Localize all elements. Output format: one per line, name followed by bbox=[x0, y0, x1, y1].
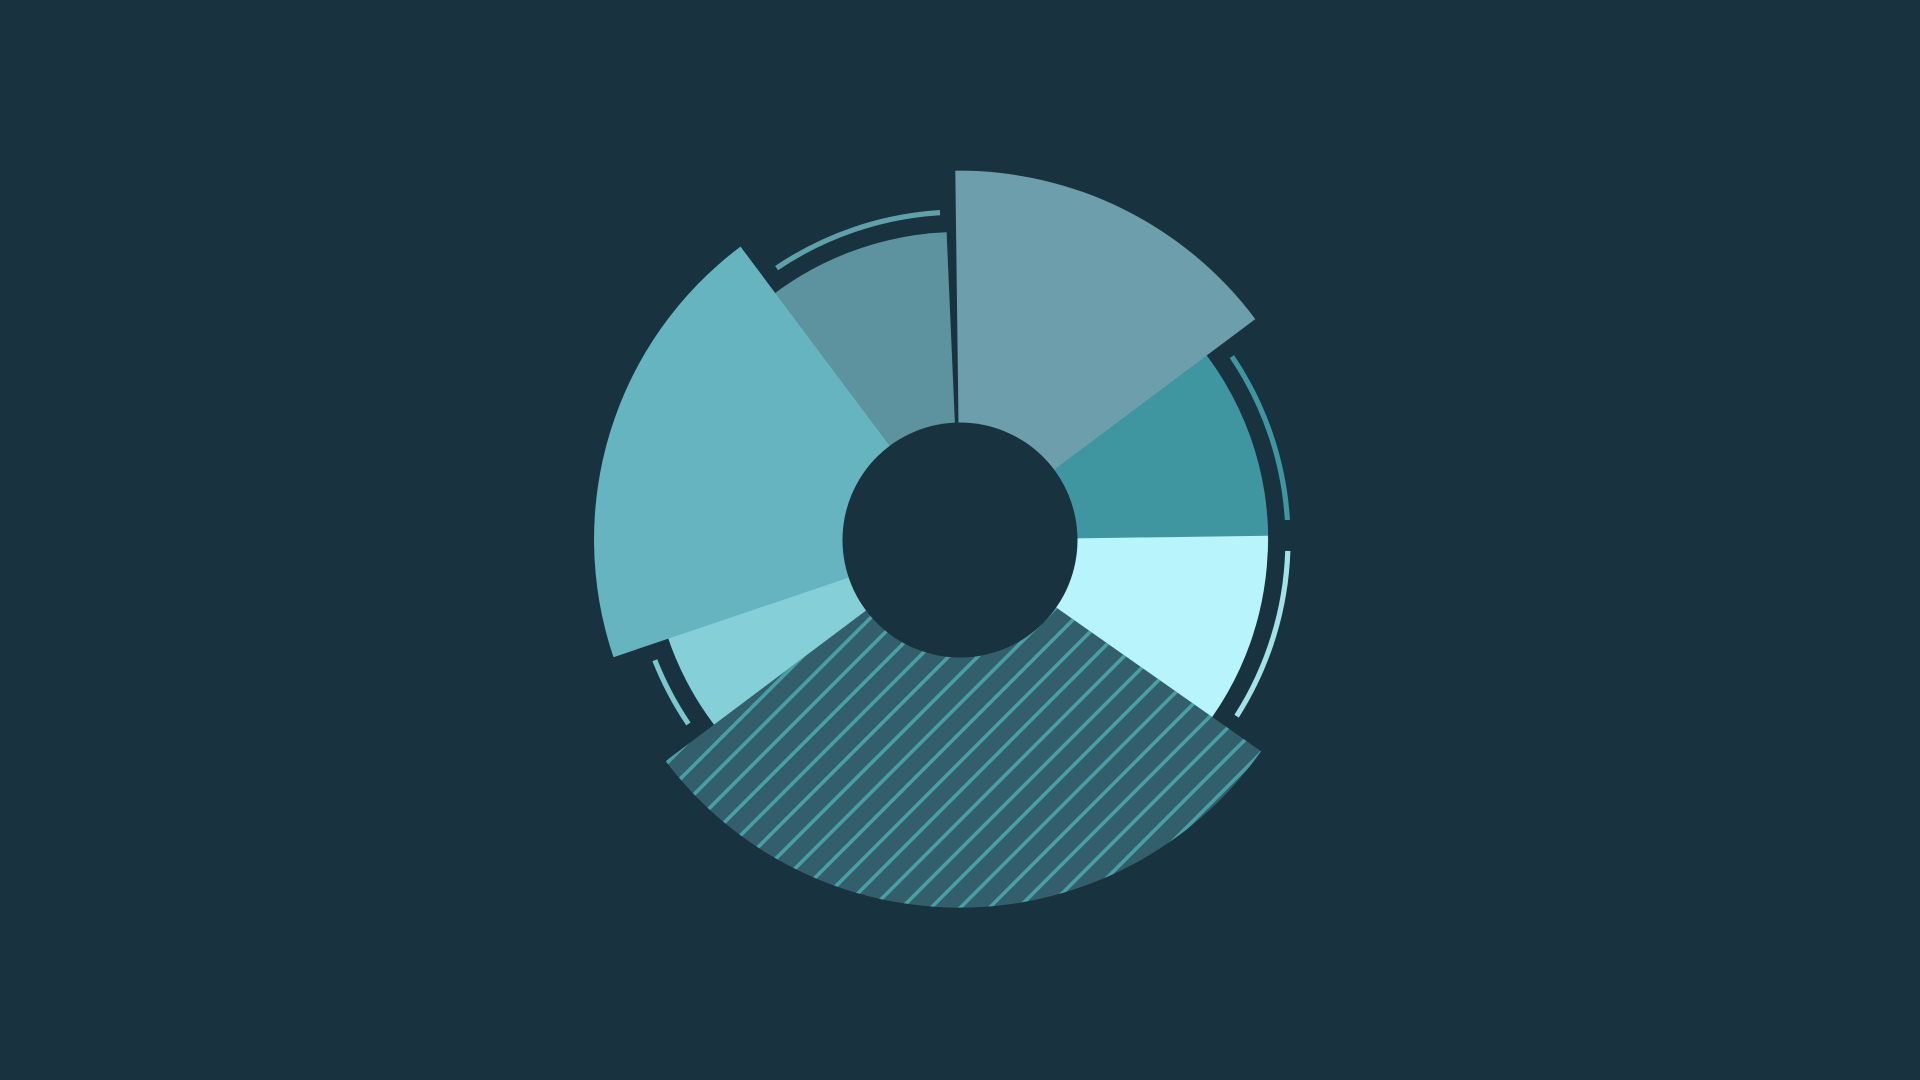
arc: right lower bbox=[1237, 551, 1288, 716]
slice: left tall bbox=[594, 247, 960, 657]
center hole bbox=[842, 422, 1078, 658]
arc: lower left bbox=[655, 660, 688, 724]
slice: bottom hatched bbox=[666, 608, 1261, 908]
arc: upper left bbox=[777, 213, 940, 268]
radial pie chart bbox=[594, 170, 1290, 908]
slice: lower left light bbox=[660, 540, 960, 744]
slice: upper left short bbox=[760, 232, 960, 540]
arc: right upper bbox=[1232, 357, 1287, 520]
slice: right lower pale bbox=[960, 536, 1268, 738]
slice: right upper teal bbox=[960, 335, 1268, 552]
slice: top right tall bbox=[955, 171, 1255, 540]
